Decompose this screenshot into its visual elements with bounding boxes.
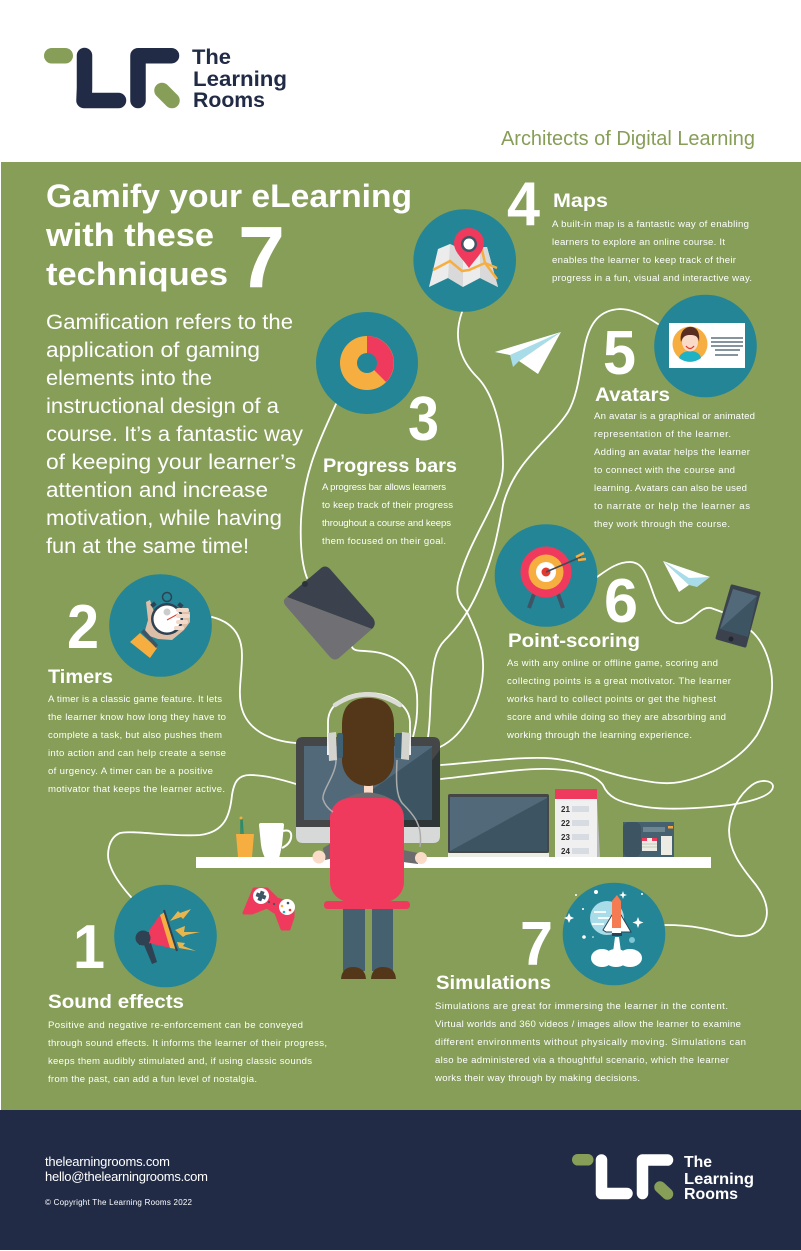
- body text: [48, 694, 226, 795]
- torso: [330, 798, 404, 902]
- body text: [48, 1020, 327, 1085]
- intro paragraph: course. It’s a fantastic way: [46, 422, 303, 446]
- heading: Timers: [48, 666, 113, 688]
- body text: to narrate or help the learner as: [594, 501, 750, 512]
- body text: throughout a course and keeps: [322, 518, 451, 529]
- desk: [196, 857, 711, 868]
- intro headline: 7: [238, 209, 285, 306]
- intro headline: techniques: [46, 256, 228, 292]
- chair seat: [324, 901, 410, 909]
- section 1: sound effects: [48, 885, 327, 1085]
- paper plane small: [663, 561, 710, 592]
- desk calendar: 22: [561, 819, 570, 828]
- body text: [506, 658, 732, 741]
- footer contact details: hello@thelearningrooms.com: [45, 1169, 208, 1184]
- main green panel: [1, 162, 801, 1110]
- body text: to keep track of their progress: [322, 500, 453, 511]
- body text: learning. Avatars can also be used: [594, 483, 747, 494]
- icon: map: [413, 209, 516, 312]
- neck and shoulders: [340, 784, 396, 802]
- body text: the learner know how long they have to: [48, 712, 226, 723]
- monitor: [296, 737, 440, 843]
- header logo: Learning: [193, 68, 287, 91]
- desk calendar: 21: [561, 805, 570, 814]
- intro paragraph: instructional design of a: [46, 394, 279, 418]
- intro paragraph: motivation, while having: [46, 506, 282, 530]
- intro paragraph: attention and increase: [46, 478, 268, 502]
- desk phone: [623, 822, 674, 857]
- body text: A progress bar allows learners: [322, 482, 446, 493]
- body text: different environments without physically moving. Simulations can: [435, 1037, 746, 1048]
- section 2: timers: [48, 574, 226, 795]
- number 4: 4: [507, 170, 540, 239]
- header logo: Rooms: [193, 89, 265, 112]
- number 6: 6: [604, 567, 638, 636]
- body text: learners to explore an online course. It: [552, 237, 725, 248]
- heading: Simulations: [436, 972, 551, 994]
- body text: As with any online or offline game, scoring and: [507, 658, 718, 669]
- body text: Adding an avatar helps the learner: [594, 447, 751, 458]
- body text: of urgency. A timer can be a positive: [48, 766, 213, 777]
- heading: Avatars: [595, 384, 670, 406]
- heading: Sound effects: [48, 991, 184, 1013]
- intro paragraph: fun at the same time!: [46, 534, 249, 558]
- heading: Point-scoring: [508, 630, 640, 652]
- header logo: The: [192, 46, 231, 69]
- section 6: point-scoring: [495, 524, 732, 741]
- body text: Simulations are great for immersing the learner in the content.: [435, 1001, 728, 1012]
- body text: they work through the course.: [594, 519, 730, 530]
- smartphone: [717, 586, 759, 646]
- footer contact details: thelearningrooms.com: [45, 1154, 170, 1169]
- body text: into action and can help create a sense: [48, 748, 226, 759]
- tablet: [284, 566, 375, 660]
- header logo: [44, 46, 287, 112]
- number 7: 7: [520, 910, 553, 979]
- person at desk: [312, 693, 427, 979]
- body text: to connect with the course and: [594, 465, 735, 476]
- body text: [594, 411, 755, 530]
- body text: works hard to collect points or get the highest: [506, 694, 716, 705]
- intro headline: with these: [45, 217, 214, 253]
- section 3: progress bars: [316, 312, 457, 547]
- body text: works their way through by making decisions.: [434, 1073, 640, 1084]
- number 1: 1: [73, 913, 105, 982]
- body text: An avatar is a graphical or animated: [594, 411, 755, 422]
- body text: keeps them audibly stimulated and, if using classic sounds: [48, 1056, 312, 1067]
- arms and hands: [312, 842, 427, 864]
- body text: A built-in map is a fantastic way of enabling: [552, 219, 749, 230]
- icon: target: [495, 524, 597, 627]
- legs and shoes: [341, 905, 396, 979]
- body text: through sound effects. It informs the learner of their progress,: [48, 1038, 327, 1049]
- body text: score and while doing so they are absorbing and: [507, 712, 726, 723]
- number 5: 5: [603, 319, 636, 388]
- body text: them focused on their goal.: [322, 536, 446, 547]
- intro paragraph: [46, 310, 303, 558]
- heading: Progress bars: [323, 455, 457, 477]
- body text: from the past, can add a fun level of nostalgia.: [48, 1074, 257, 1085]
- body text: collecting points is a great motivator. The learner: [507, 676, 732, 687]
- intro headline: [45, 178, 412, 306]
- section 4: maps: [413, 170, 752, 312]
- body text: [434, 1001, 746, 1084]
- laptop: [448, 794, 549, 857]
- hair: [342, 698, 394, 786]
- icon: megaphone: [114, 885, 217, 987]
- icon: rocket: [563, 883, 665, 985]
- number 3: 3: [408, 385, 439, 454]
- body text: A timer is a classic game feature. It lets: [48, 694, 222, 705]
- heading: Maps: [553, 190, 608, 212]
- headphones: [323, 693, 421, 847]
- desk calendar: [555, 789, 600, 857]
- footer logo: Learning: [684, 1171, 754, 1188]
- body text: complete a task, but also pushes them: [48, 730, 222, 741]
- icon: avatar card: [654, 295, 757, 397]
- section 7: simulations: [434, 883, 746, 1084]
- copyright: © Copyright The Learning Rooms 2022: [45, 1198, 193, 1207]
- tagline: Architects of Digital Learning: [501, 128, 755, 150]
- footer contact details: [45, 1154, 208, 1184]
- body text: also be administered via a thoughtful scenario, which the learner: [435, 1055, 730, 1066]
- desk calendar: 23: [561, 833, 570, 842]
- connecting wires: [108, 309, 773, 936]
- intro headline: Gamify your eLearning: [46, 178, 412, 214]
- desk calendar: 24: [561, 847, 570, 856]
- body text: Virtual worlds and 360 videos / images allow the learner to examine: [435, 1019, 741, 1030]
- body text: [552, 219, 752, 284]
- intro paragraph: application of gaming: [46, 338, 260, 362]
- body text: [322, 482, 453, 547]
- intro paragraph: Gamification refers to the: [46, 310, 293, 334]
- icon: donut chart: [316, 312, 418, 414]
- section 5: avatars: [594, 295, 757, 530]
- body text: enables the learner to keep track of their: [552, 255, 737, 266]
- body text: progress in a fun, visual and interactive way.: [552, 273, 752, 284]
- icon: stopwatch in hand: [109, 574, 212, 677]
- footer logo: The: [684, 1154, 712, 1171]
- gamepad: [244, 888, 295, 929]
- footer logo: [572, 1154, 754, 1203]
- body text: Positive and negative re-enforcement can be conveyed: [48, 1020, 303, 1031]
- footer band: [0, 1110, 801, 1250]
- mug: [259, 823, 291, 858]
- intro paragraph: of keeping your learner’s: [46, 450, 296, 474]
- body text: representation of the learner.: [594, 429, 731, 440]
- footer logo: Rooms: [684, 1186, 738, 1203]
- body text: working through the learning experience.: [506, 730, 692, 741]
- paper plane: [495, 332, 561, 374]
- number 2: 2: [67, 593, 99, 662]
- intro paragraph: elements into the: [46, 366, 212, 390]
- pencil cup: [236, 816, 254, 857]
- body text: motivator that keeps the learner active.: [48, 784, 225, 795]
